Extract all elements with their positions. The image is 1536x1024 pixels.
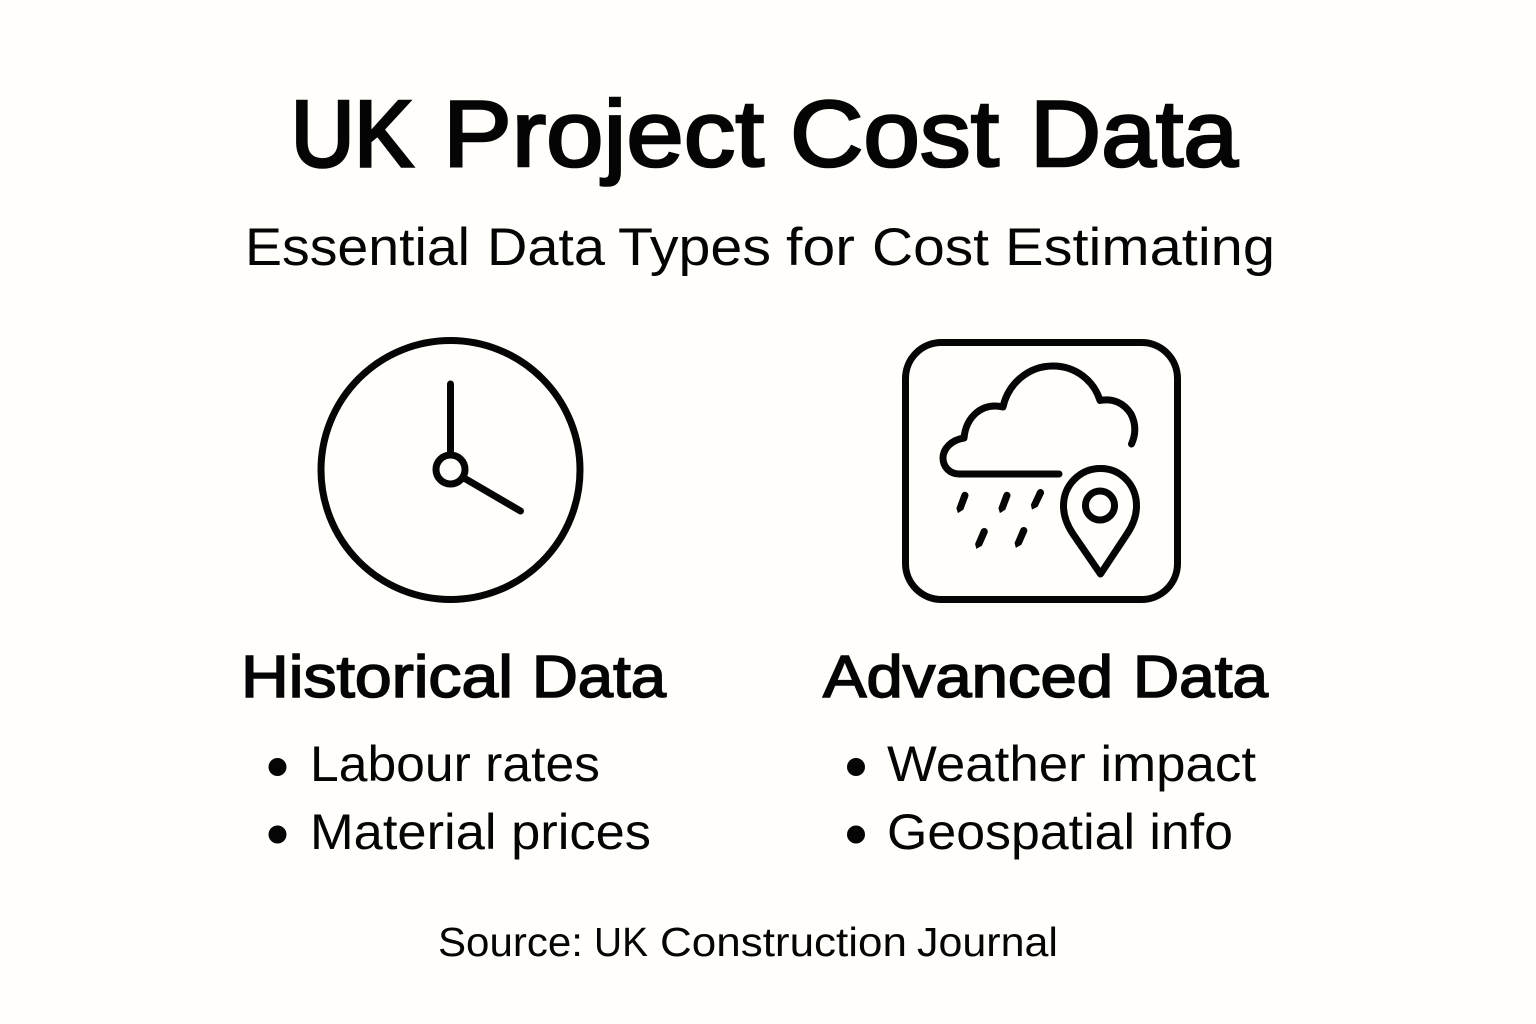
source note: Source:: [438, 919, 583, 965]
icon: clock: [321, 340, 580, 600]
bullet: labour rates: [268, 758, 286, 776]
list: historical data: [268, 736, 651, 860]
heading: historical data: Data: [532, 644, 666, 710]
title: UK: [291, 81, 413, 186]
item: material prices: Material prices: [310, 804, 651, 860]
item: weather impact: Weather impact: [887, 736, 1256, 792]
source note: Journal: [917, 919, 1058, 965]
title: Data: [1030, 81, 1239, 186]
heading: advanced data: [823, 644, 1268, 710]
heading: historical data: Historical: [241, 644, 513, 710]
source note: [438, 919, 1058, 965]
subtitle: for: [786, 218, 855, 277]
subtitle: Types: [618, 218, 771, 277]
heading: advanced data: Data: [1133, 644, 1268, 710]
item: geospatial info: Geospatial info: [887, 804, 1233, 860]
title: Cost: [790, 81, 999, 186]
pin centre: [1086, 491, 1114, 520]
title: [291, 81, 1239, 186]
bullet: geospatial info: [847, 826, 865, 844]
bullet: weather impact: [847, 758, 865, 776]
source note: UK: [594, 919, 648, 965]
subtitle: [245, 218, 1275, 277]
subtitle: Estimating: [1005, 218, 1275, 277]
title: Project: [443, 81, 764, 186]
bullet: material prices: [268, 826, 286, 844]
subtitle: Cost: [872, 218, 989, 277]
heading: advanced data: Advanced: [823, 644, 1113, 710]
icon frame: [906, 342, 1178, 600]
list: advanced data: [847, 736, 1256, 860]
icon: weather and location: [906, 342, 1178, 600]
location pin: [1064, 468, 1136, 574]
item: labour rates: Labour rates: [310, 736, 600, 792]
subtitle: Data: [487, 218, 606, 277]
cloud: [943, 366, 1135, 474]
subtitle: Essential: [245, 218, 470, 277]
source note: Construction: [660, 919, 907, 965]
rain drops: [955, 488, 1045, 550]
heading: historical data: [241, 644, 666, 710]
